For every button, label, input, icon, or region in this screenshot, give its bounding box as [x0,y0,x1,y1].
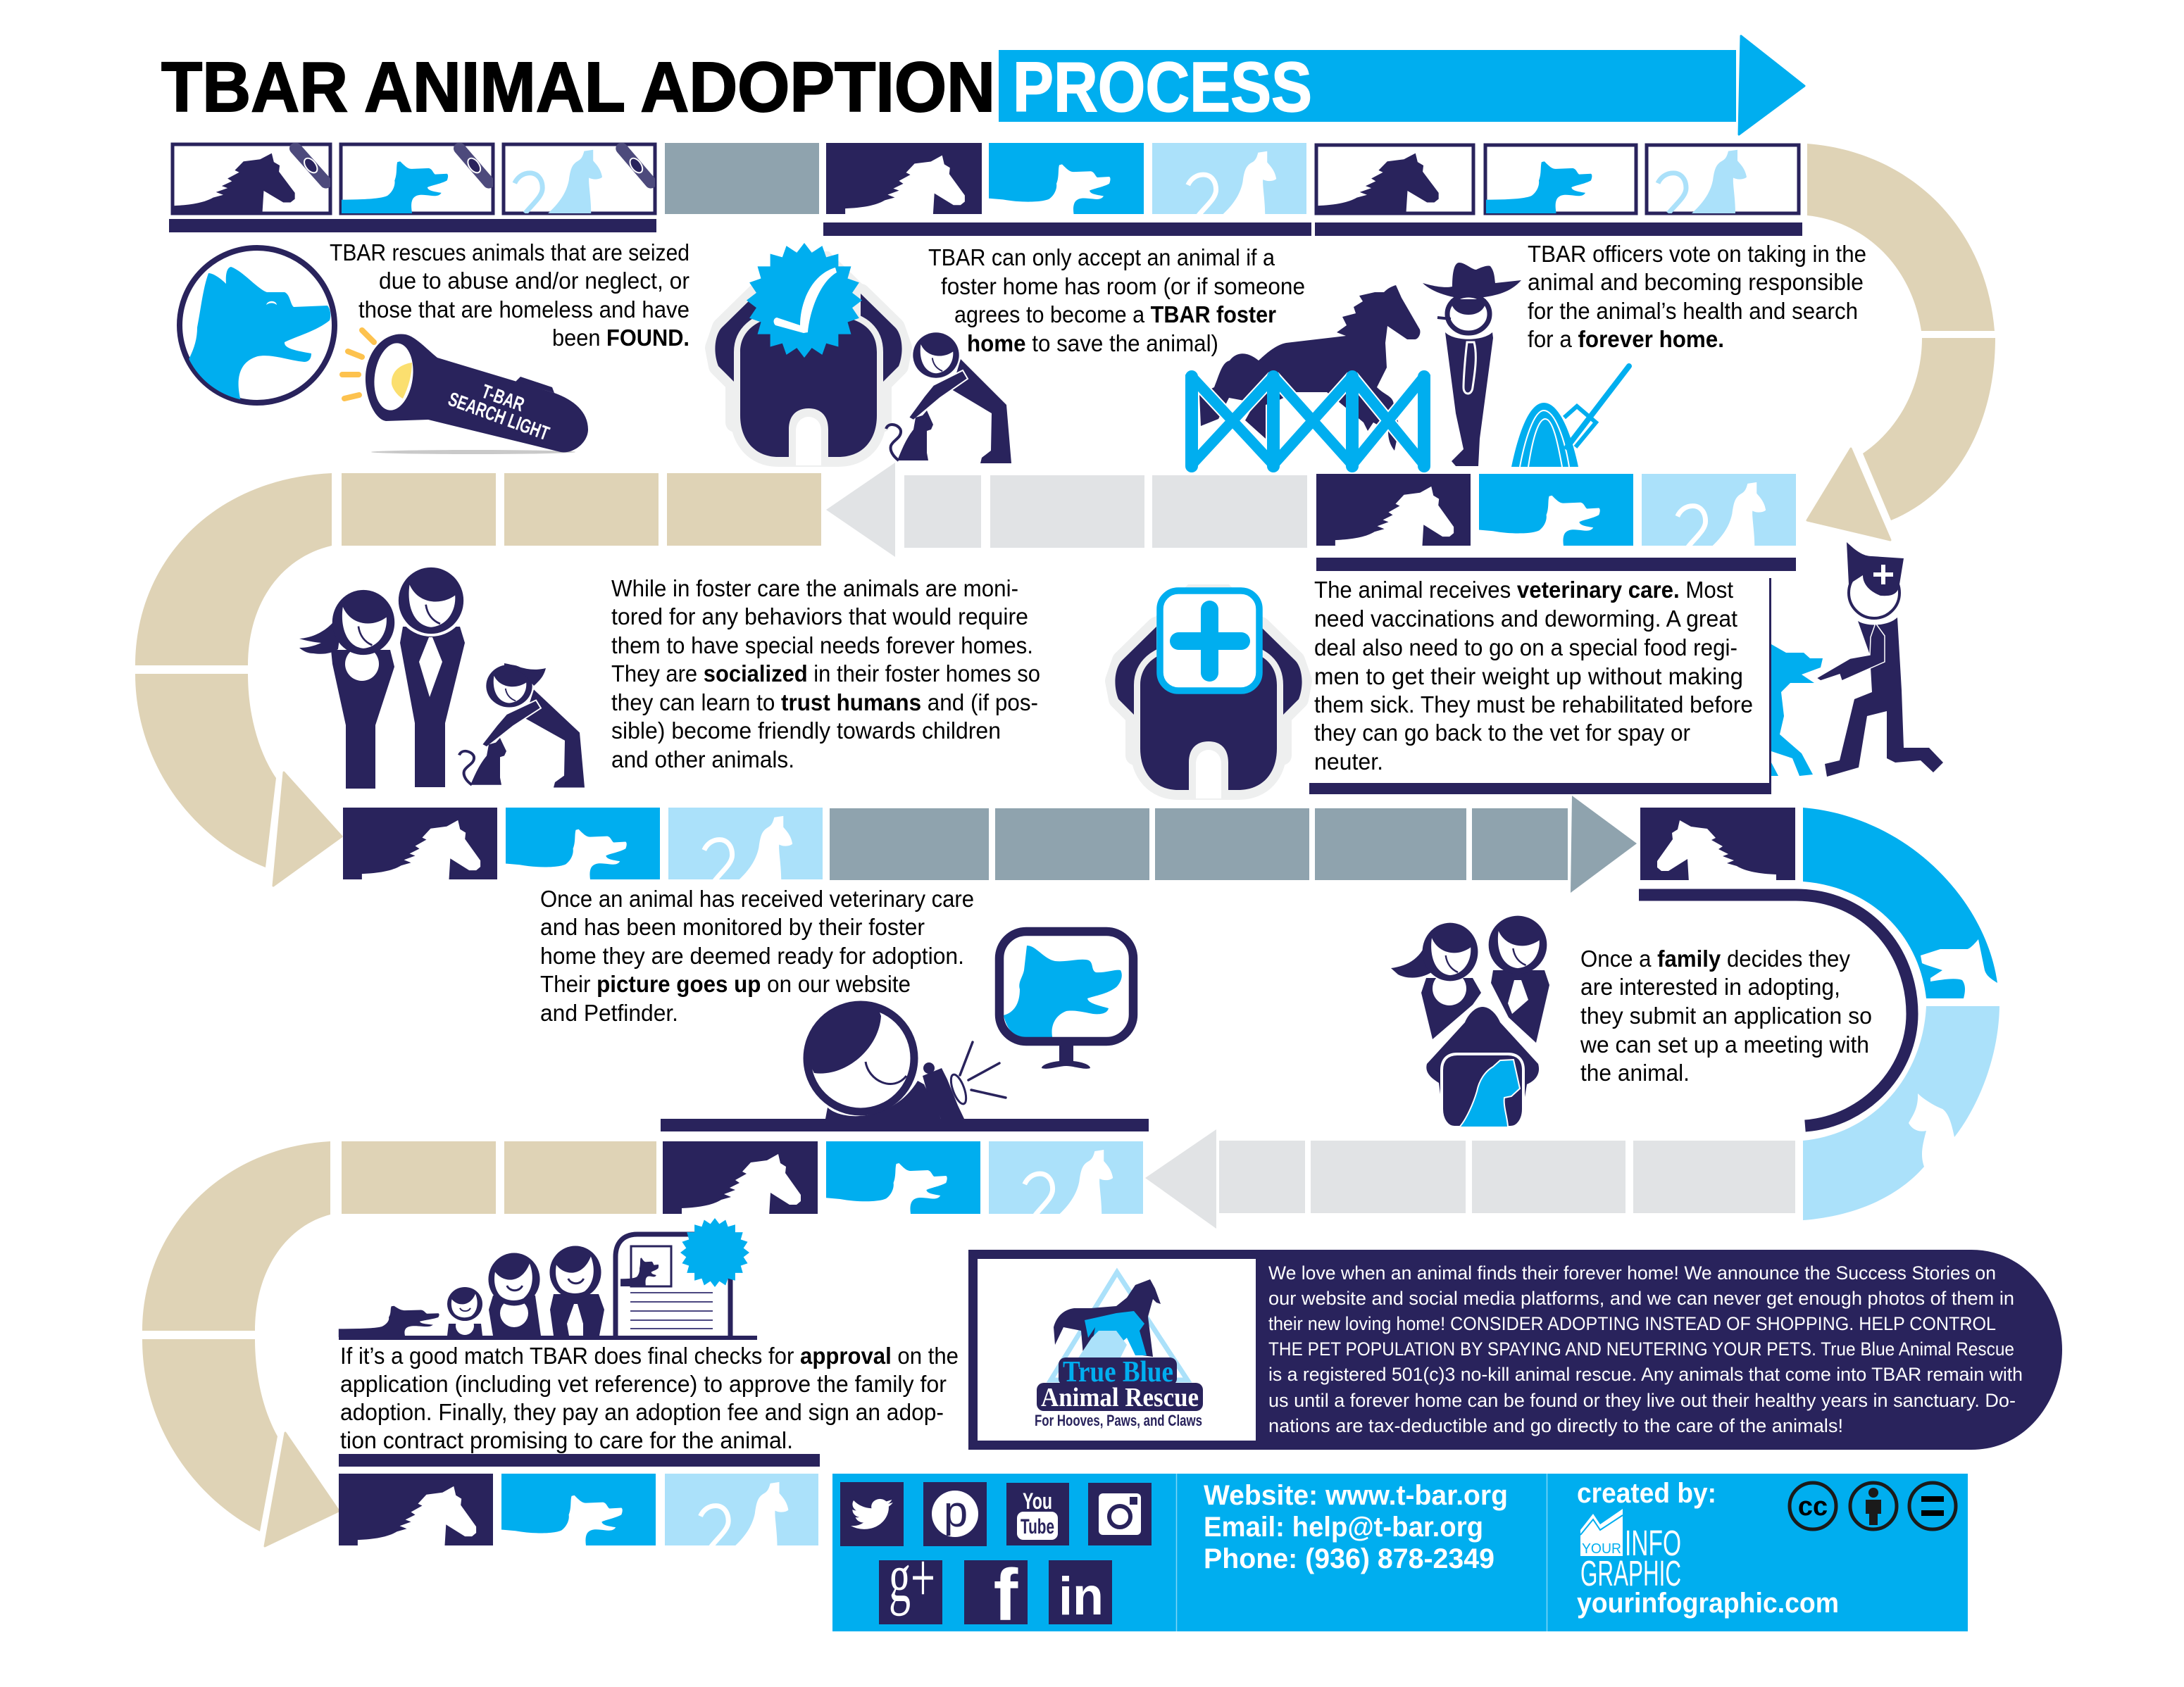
panel: footer contact [832,1474,1968,1636]
icon: pinterest [923,1482,987,1546]
light blue cat tile [989,1141,1143,1215]
light blue arc with cat [1803,1006,1999,1220]
text box: veterinary care: they can go back to the vet for spay or [1314,720,1690,746]
process heading: PROCESS [1013,48,1312,127]
child [447,1287,482,1336]
created by: created by: [1577,1478,1716,1509]
panel text: our website and social media platforms, and we can never get enough photos of them in [1268,1288,2014,1309]
text box: veterinary care: men to get their weight up without making [1314,663,1743,689]
logo card [978,1259,1256,1441]
panel text: is a registered 501(c)3 no-kill animal rescue. Any animals that come into TBAR remain with [1268,1364,2023,1385]
text: family application [1580,946,1872,1086]
light blue cat tile [668,808,823,881]
outlined horse tile with search light [171,144,330,213]
step row 3 tiles [343,796,1795,893]
outlined dog tile with search light [341,144,493,213]
blue arc with dog [1803,808,1997,998]
mother [488,1253,541,1336]
icon: family with house and cat [1391,916,1549,1127]
outlined cat tile with search light [504,144,655,213]
icon: family and approved application [339,1218,757,1340]
icon: youtube [1006,1483,1069,1545]
icon: facebook: f [994,1555,1018,1636]
icon: youtube: Tube [1021,1515,1054,1538]
light blue cat tile [1152,143,1306,215]
icon: facebook [964,1555,1028,1636]
text: officers vote: TBAR officers vote on taking in the [1528,241,1866,267]
navy horse tile [663,1141,818,1216]
icon: foster home with badge [715,243,902,465]
light blue cat tile [1642,474,1796,547]
logo name: True Blue [1063,1356,1173,1388]
step row 1 tiles [171,143,1799,217]
website of creator: yourinfographic.com [1577,1588,1839,1619]
panel text: We love when an animal finds their forever home! We announce the Success Stories on [1268,1262,1996,1284]
text: officers vote [1528,241,1866,352]
blue dog tile [987,143,1144,217]
grey tile [665,143,819,214]
contact details [1204,1480,1508,1574]
navy horse tile [1316,474,1471,548]
text: family application: they submit an application so [1580,1003,1872,1029]
text: foster care: While in foster care the animals are moni- [611,575,1018,601]
logo card: For Hooves, Paws, and Claws [1035,1412,1202,1429]
text: officers vote: animal and becoming responsible [1528,269,1864,295]
text: rescue [330,239,689,351]
title arrow: process [999,36,1804,134]
grey arrow left [1145,1129,1216,1229]
outlined cat tile [1647,145,1799,213]
grey arrow left [826,463,895,557]
icon: linkedin [1049,1560,1112,1626]
search light label: SEARCH LIGHT [445,388,552,444]
search light label: T-BAR [479,380,528,415]
icon: couple adopting [299,565,466,789]
text: family application: we can set up a meeting with [1580,1031,1869,1058]
contact details: Phone: (936) 878-2349 [1204,1543,1495,1574]
father [549,1246,604,1336]
your infographic logo: YOUR [1582,1541,1621,1557]
text: website listing: and Petfinder. [540,1000,678,1026]
text: website listing [540,886,974,1026]
panel text: THE PET POPULATION BY SPAYING AND NEUTERING YOUR PETS. True Blue Animal Rescue [1268,1338,2014,1360]
icon: person petting cat [886,332,1011,463]
text: officers vote: for a forever home. [1528,326,1724,352]
tan arrowhead [1807,449,1890,540]
text: rescue: been FOUND. [552,325,689,351]
bar under row 2 [1316,558,1796,571]
tan arc top right [1807,144,1995,540]
your infographic logo: INFO [1625,1523,1681,1563]
panel: true blue rescue [968,1250,2062,1450]
dog [339,1306,439,1337]
blue dog tile [1477,474,1633,548]
text: approval: adoption. Finally, they pay an adoption fee and sign an adop- [340,1399,944,1425]
text: foster care: tored for any behaviors that would require [611,603,1028,629]
blue dog tile [824,1141,980,1217]
icon: youtube: You [1023,1488,1052,1514]
creative commons icons: cc [1798,1492,1828,1522]
text: website listing: Their picture goes up on our website [540,971,911,997]
contact details: Website: www.t-bar.org [1204,1480,1508,1511]
creative commons icons [1790,1483,1956,1529]
icon: vet with dog [1771,542,1943,777]
text: foster care: they can learn to trust humans and (if pos- [611,689,1038,715]
application document [616,1218,749,1336]
icon: twitter [840,1482,904,1546]
navy horse tile [343,808,497,882]
step row 4 tiles [342,1129,1795,1229]
icon: horse behind fence [1192,285,1424,466]
icon: google plus: g+ [889,1538,935,1617]
navy horse tile [826,143,982,216]
tan arrowhead [273,772,342,886]
flipped navy horse tile [1640,808,1795,882]
text: approval: application (including vet reference) to approve the family for [340,1371,947,1397]
search light label [445,380,552,444]
navy inner arc [1639,895,1912,1126]
text: family application: Once a family decides they [1580,946,1850,972]
icon: linkedin: in [1059,1567,1104,1626]
bar under approval [339,1454,820,1467]
text: website listing: Once an animal has received veterinary care [540,886,974,912]
panel text: us until a forever home can be found or they live out their healthy years in sanctuary. Do- [1268,1390,2016,1411]
panel text [1268,1262,2023,1436]
logo card: Animal Rescue [1041,1383,1199,1412]
icon: google plus [879,1538,942,1624]
text: foster room: agrees to become a TBAR foster [954,301,1276,327]
text: foster care: them to have special needs forever homes. [611,632,1033,658]
text: officers vote: for the animal’s health and search [1528,298,1858,324]
panel text: their new loving home! CONSIDER ADOPTING INSTEAD OF SHOPPING. HELP CONTROL [1268,1313,1996,1334]
text box: veterinary care [1309,577,1771,794]
icon: person petting cat [459,663,585,788]
text: foster care [611,575,1040,772]
text: foster room: home to save the animal) [967,330,1218,356]
text: foster room: foster home has room (or if someone [941,273,1305,299]
blue dog tile [504,808,660,882]
your infographic logo: GRAPHIC [1580,1553,1681,1593]
text: foster room [928,244,1305,356]
icon: monitor with dog [999,932,1133,1069]
icon: vet home with plus [1115,584,1302,798]
outlined horse tile [1315,145,1473,213]
icon: cowboy farmer [1423,263,1521,466]
text box: veterinary care: The animal receives veterinary care. Most [1314,577,1733,603]
outlined dog tile [1485,145,1636,213]
step row 2 tiles [342,463,1796,557]
text: rescue: TBAR rescues animals that are seized [330,239,689,265]
text: rescue: due to abuse and/or neglect, or [379,268,689,294]
text: approval [340,1343,959,1453]
text box: veterinary care: need vaccinations and deworming. A great [1314,606,1737,632]
blue dog tile [499,1474,656,1548]
text: approval: If it’s a good match TBAR does final checks for approval on the [340,1343,959,1369]
icon: instagram [1088,1483,1152,1545]
contact details: Email: help@t-bar.org [1204,1512,1483,1543]
text: family application: are interested in adopting, [1580,974,1840,1000]
text: family application: the animal. [1580,1060,1690,1086]
light blue cat tile [665,1474,818,1547]
tan arc left lower [142,1141,339,1546]
step bars row 1 [169,219,1802,236]
icon: pinterest: p [944,1488,968,1536]
icon: photographer [806,1001,1006,1119]
text: foster care: and other animals. [611,746,794,772]
slate arrow right [1571,796,1637,893]
title: TBAR ANIMAL ADOPTION [161,48,995,127]
text box: veterinary care: them sick. They must be rehabilitated before [1314,691,1753,717]
text: foster room: TBAR can only accept an animal if a [928,244,1275,270]
text box: veterinary care: deal also need to go on a special food regi- [1314,634,1737,660]
text: rescue: those that are homeless and have [358,296,689,322]
icon: haystack and pitchfork [1511,366,1629,467]
text: website listing: and has been monitored by their foster [540,914,925,940]
text: foster care: sible) become friendly towards children [611,717,1001,744]
text: approval: tion contract promising to care for the animal. [340,1427,793,1453]
tan arrowhead [265,1433,339,1546]
step row 5 tiles [339,1474,818,1548]
tan arc left upper [135,473,342,886]
text box: veterinary care: neuter. [1314,748,1383,774]
icon: search light [342,330,588,454]
panel text: nations are tax-deductible and go directly to the care of the animals! [1268,1415,1843,1436]
navy horse tile [339,1474,493,1548]
bar under photographer [661,1119,1149,1131]
text: foster care: They are socialized in their foster homes so [611,660,1040,686]
your infographic logo [1580,1509,1681,1593]
icon: dog in spotlight circle [176,248,335,403]
text: website listing: home they are deemed ready for adoption. [540,943,964,969]
